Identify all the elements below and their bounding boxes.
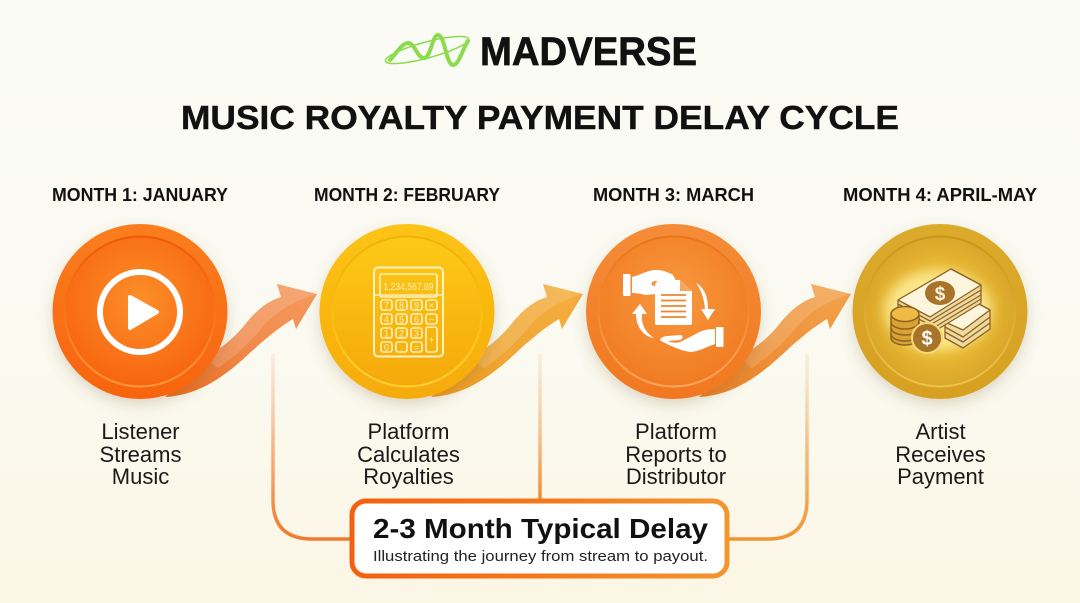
icon: calculator: 7 (384, 300, 389, 310)
step 3: March (586, 185, 761, 489)
icon: money stacks and coins: $ (921, 328, 933, 350)
icon: calculator: 1,234,567.89 (384, 282, 434, 293)
icon: calculator: 2 (399, 328, 404, 338)
label: platform calculates royalties: Platform (368, 419, 449, 444)
icon: calculator: 3 (414, 328, 419, 338)
step 2: February (314, 185, 500, 489)
icon: money stacks and coins (884, 269, 992, 353)
heading: month 2: MONTH 2: FEBRUARY (314, 185, 500, 205)
icon: calculator: 0 (384, 342, 389, 352)
label: platform calculates royalties: Royalties (363, 464, 454, 489)
heading: month 1: MONTH 1: JANUARY (52, 185, 228, 205)
label: platform calculates royalties: Calculates (357, 442, 460, 467)
icon: calculator: 5 (399, 314, 404, 324)
heading: month 3: MONTH 3: MARCH (593, 185, 754, 205)
icon: calculator: = (414, 342, 419, 352)
step 1: January (52, 185, 228, 489)
callout heading: 2-3 Month Typical Delay (373, 513, 708, 544)
icon: calculator: 9 (414, 300, 419, 310)
label: listener streams music: Listener (101, 419, 180, 444)
icon: calculator: 1 (384, 328, 389, 338)
label: artist receives payment: Artist (915, 419, 966, 444)
icon: calculator: . (400, 342, 403, 352)
logo: Madverse (383, 30, 697, 74)
label: listener streams music: Music (112, 464, 169, 489)
icon: hands exchanging document (623, 270, 724, 352)
wordmark: MADVERSE (480, 30, 697, 74)
icon: calculator (374, 268, 443, 356)
icon: calculator: − (429, 314, 434, 324)
icon: play button (100, 272, 180, 352)
step 4: April-May (843, 185, 1037, 489)
icon: money stacks and coins: $ (935, 284, 946, 305)
label: platform reports to distributor: Reports to (625, 442, 727, 467)
label: listener streams music: Streams (100, 442, 181, 467)
label: platform reports to distributor: Distributor (626, 464, 726, 489)
icon: calculator: 4 (384, 314, 389, 324)
icon: green wave and orbit (383, 31, 471, 69)
heading: month 4: MONTH 4: APRIL-MAY (843, 185, 1037, 205)
callout: typical delay (352, 501, 727, 576)
icon: calculator: 8 (399, 300, 404, 310)
icon: calculator: + (429, 335, 434, 345)
circle badge: yellow (320, 224, 494, 399)
arrow: month 1 to month 2 (165, 284, 317, 397)
callout subtext: Illustrating the journey from stream to payout. (373, 548, 708, 565)
arrow: month 2 to month 3 (431, 284, 583, 397)
title: MUSIC ROYALTY PAYMENT DELAY CYCLE (181, 99, 899, 136)
icon: calculator: × (429, 300, 434, 310)
label: artist receives payment: Payment (897, 464, 984, 489)
circle badge: orange (586, 224, 761, 399)
label: platform reports to distributor: Platform (635, 419, 717, 444)
arrow: month 3 to month 4 (699, 284, 851, 397)
circle badge: orange (52, 224, 228, 399)
connector: delay bracket lines (273, 354, 807, 539)
circle badge: gold (852, 224, 1028, 399)
icon: calculator: 6 (414, 314, 419, 324)
label: artist receives payment: Receives (895, 442, 986, 467)
